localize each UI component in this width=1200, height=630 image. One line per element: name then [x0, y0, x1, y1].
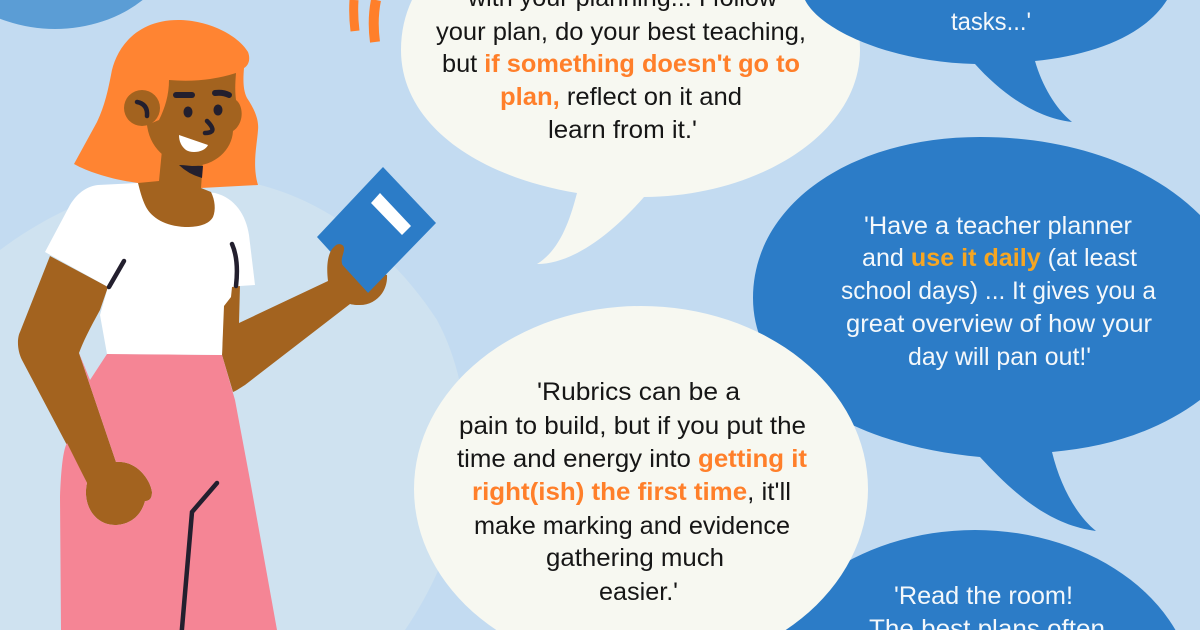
facial features: [137, 93, 229, 133]
speech bubble: teacher planner quote: [753, 137, 1200, 531]
speech bubble: rubrics quote: [414, 306, 868, 630]
clothing lines: [109, 244, 237, 630]
pale background circle: [0, 178, 466, 630]
right arm and palm: [222, 262, 387, 392]
neck shadow: [179, 165, 203, 178]
speech bubble: planning quote: but if something doesn't go to: [442, 50, 800, 78]
thumb: [327, 244, 368, 304]
speech bubble: teacher planner quote: 'Have a teacher planner: [864, 212, 1132, 240]
speech bubble: teacher planner quote: school days) ... It gives you a: [841, 277, 1156, 305]
speech bubble: read the room quote: [755, 530, 1195, 630]
speech bubble: rubrics quote: easier.': [599, 578, 678, 606]
speech bubble: planning quote: learn from it.': [548, 116, 697, 144]
speech bubble: planning quote: [401, 0, 860, 264]
shirt: [45, 183, 255, 355]
skirt: [60, 353, 277, 630]
speech bubble: rubrics quote: right(ish) the first time , it'll: [472, 478, 791, 506]
top-left blue bubble: [0, 0, 180, 29]
smile: [179, 135, 208, 152]
speech bubble: read the room quote: 'Read the room!: [894, 582, 1073, 610]
speech bubble: tasks quote: [805, 0, 1170, 122]
speech bubble: rubrics quote: 'Rubrics can be a: [537, 378, 740, 406]
book: [317, 167, 436, 293]
speech bubble: rubrics quote: gathering much: [546, 544, 724, 572]
hair: [74, 20, 258, 188]
orange emphasis marks: [354, 0, 376, 42]
speech bubble: rubrics quote: make marking and evidence: [474, 512, 790, 540]
woman with book: [18, 20, 436, 630]
speech bubble: rubrics quote: time and energy into getting it: [457, 445, 808, 473]
ear: [124, 90, 160, 126]
speech bubble: planning quote: plan, reflect on it and: [500, 83, 742, 111]
speech bubble: teacher planner quote: day will pan out!': [908, 343, 1091, 371]
speech bubble: teacher planner quote: and use it daily (at least: [862, 244, 1137, 272]
speech bubble: rubrics quote: pain to build, but if you put the: [459, 412, 806, 440]
speech bubble: teacher planner quote: great overview of how your: [846, 310, 1152, 338]
neck: [138, 150, 215, 227]
face: [147, 73, 242, 166]
speech bubble: tasks quote: tasks...': [951, 8, 1031, 36]
left arm and fist: [18, 256, 152, 525]
speech bubble: planning quote: your plan, do your best teaching,: [436, 18, 806, 46]
